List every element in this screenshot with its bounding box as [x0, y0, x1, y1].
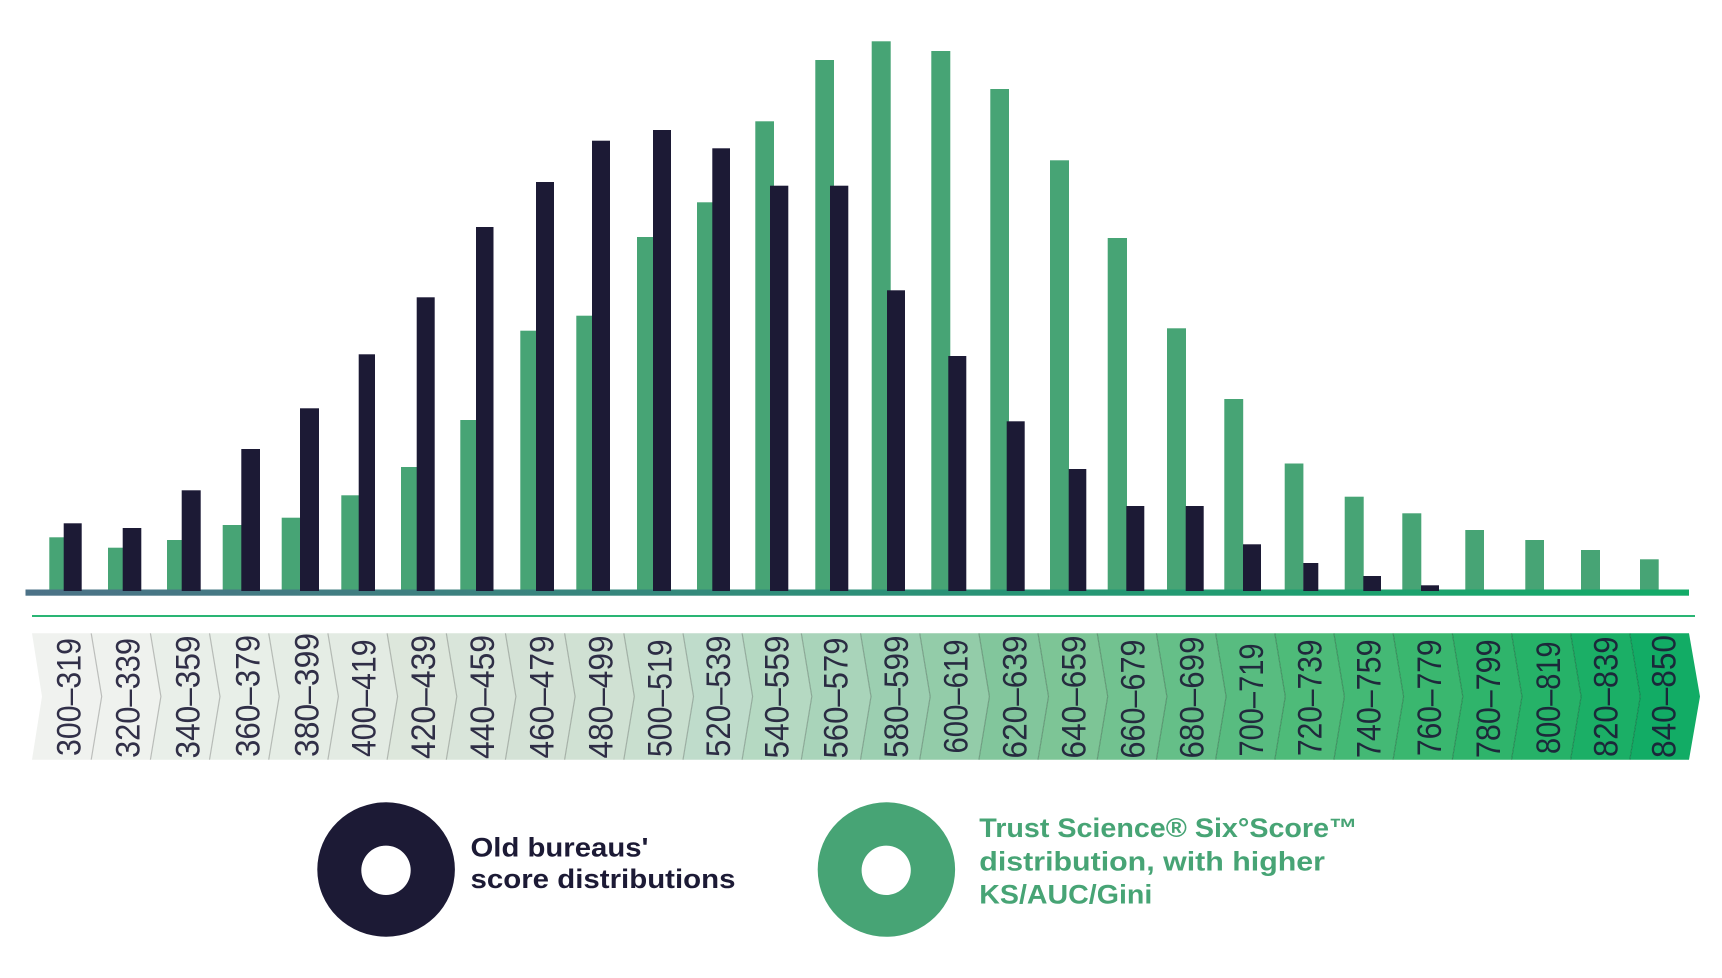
score range labels: 300–319	[51, 638, 89, 756]
score range labels: 320–339	[109, 638, 147, 758]
score range labels	[51, 633, 1684, 759]
separator line	[32, 615, 1695, 617]
legend text: old bureaus: Old bureaus'	[470, 833, 648, 863]
axis band	[26, 590, 1689, 596]
score range labels: 700–719	[1233, 644, 1271, 756]
icon: navy ring	[317, 802, 455, 937]
legend text: Trust Science	[979, 813, 1358, 909]
series: Trust Science Six°Score bars	[49, 41, 1659, 590]
legend text: old bureaus: score distributions	[470, 864, 736, 894]
score range labels: 540–559	[758, 636, 796, 758]
score range labels: 800–819	[1530, 642, 1568, 754]
legend text: old bureaus	[470, 833, 736, 894]
score range labels: 500–519	[641, 640, 679, 757]
score range labels: 840–850	[1646, 635, 1684, 758]
score range arrow ribbon	[32, 633, 1700, 760]
score range labels: 760–779	[1411, 640, 1449, 756]
score range labels: 460–479	[523, 636, 561, 758]
score range labels: 820–839	[1587, 636, 1625, 757]
score range labels: 680–699	[1174, 636, 1212, 758]
score range labels: 400–419	[346, 640, 384, 757]
legend: old bureaus	[317, 802, 736, 937]
legend text: Trust Science: Trust Science® Six°Score™	[979, 813, 1358, 843]
score range labels: 480–499	[582, 636, 620, 758]
chevron divider shadows	[91, 633, 1640, 760]
bar chart: score distributions	[26, 41, 1689, 596]
series: old bureaus bars	[64, 130, 1439, 591]
icon: green ring	[818, 802, 955, 937]
score range labels: 580–599	[878, 636, 916, 758]
score range labels: 340–359	[170, 636, 208, 758]
score range labels: 560–579	[818, 638, 856, 758]
legend: Trust Science	[818, 802, 1358, 937]
score range labels: 440–459	[464, 635, 502, 759]
score range labels: 520–539	[700, 636, 738, 757]
score range labels: 620–639	[996, 636, 1034, 758]
score range labels: 360–379	[230, 635, 268, 757]
legend text: Trust Science: distribution, with higher	[979, 847, 1325, 877]
score range labels: 660–679	[1115, 640, 1153, 758]
score range labels: 640–659	[1056, 636, 1094, 758]
score range labels: 600–619	[938, 640, 976, 754]
chevron segments	[32, 633, 1700, 760]
score range labels: 740–759	[1351, 640, 1389, 758]
score range labels: 380–399	[288, 633, 326, 757]
legend text: Trust Science: KS/AUC/Gini	[979, 879, 1152, 909]
score range labels: 780–799	[1470, 640, 1508, 758]
score range labels: 720–739	[1292, 640, 1330, 756]
score range labels: 420–439	[405, 635, 443, 759]
